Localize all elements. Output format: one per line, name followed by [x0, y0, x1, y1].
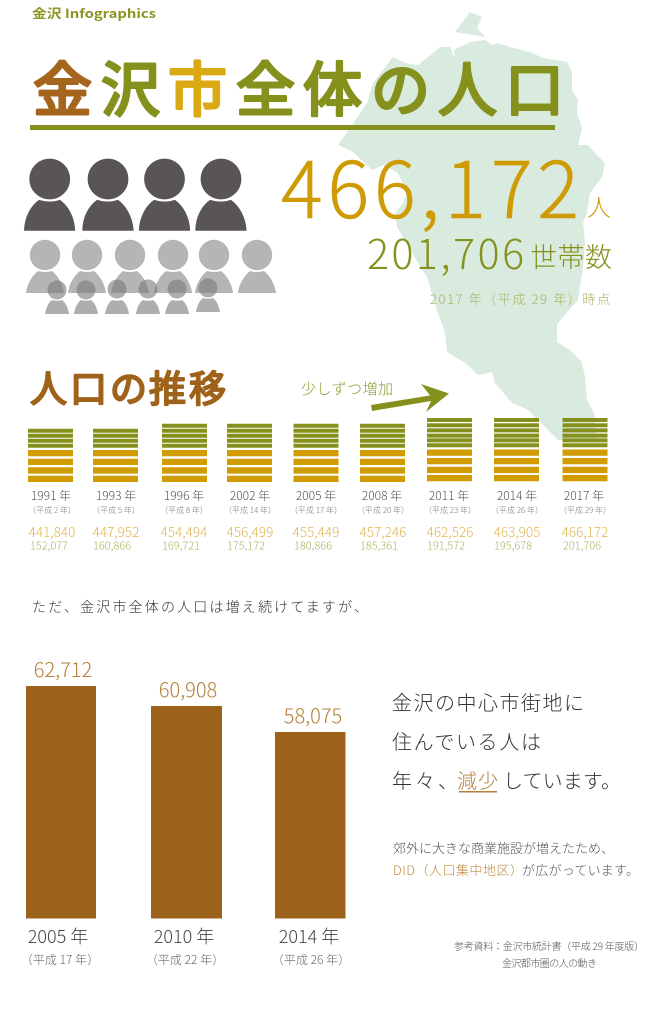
labels 2008: 457,246 [360, 521, 406, 541]
labels 1993: 1993 年 [96, 487, 136, 504]
labels 2005: （平成 17 年） [290, 505, 342, 516]
heading: population trend: の [110, 359, 147, 413]
labels 2005 [290, 487, 342, 554]
main message: 年々、 [392, 765, 458, 794]
title: 体 [303, 43, 362, 128]
labels 2014: 2014 年 [497, 487, 537, 504]
bar 1993 [93, 429, 138, 482]
title: 沢 [101, 43, 160, 128]
era label 2010: （平成 22 年） [146, 951, 224, 968]
labels 1991: 152,077 [30, 538, 68, 554]
labels 2011 [424, 487, 476, 554]
labels 1996: 169,721 [162, 538, 200, 554]
date note: 2017 年（平成 29 年）時点 [430, 289, 610, 308]
bar labels [28, 487, 611, 554]
labels 1991 [28, 487, 76, 554]
bar 2005 [26, 686, 96, 918]
title: 全 [236, 43, 295, 128]
labels 1991: 441,840 [29, 521, 75, 541]
bar 2011 [427, 418, 472, 481]
year label 2014: 2014 年 [279, 923, 339, 949]
annotation: gradually increasing: 少しずつ増加 [301, 378, 393, 399]
transition sentence: ただ、金沢市全体の人口は増え続けてますが、 [32, 597, 368, 617]
heading: population trend: 推 [149, 359, 186, 413]
labels 1996: 454,494 [161, 521, 207, 541]
title: 市 [168, 43, 227, 128]
labels 2014: （平成 26 年） [491, 505, 543, 516]
stacked bars 1991-2017 [28, 418, 608, 482]
main message: 金沢の中心市街地に [392, 687, 584, 716]
main message: 減少 [457, 765, 498, 794]
labels 1993 [92, 487, 140, 554]
value 2014: 58,075 [284, 700, 342, 729]
labels 2008: （平成 20 年） [357, 505, 409, 516]
labels 2014: 463,905 [494, 521, 540, 541]
bar 2014 [275, 732, 346, 918]
labels 2008 [357, 487, 409, 554]
bar 2014 [494, 418, 539, 481]
main message: 住んでいる人は [392, 726, 541, 755]
title [33, 43, 564, 128]
sources [454, 938, 644, 970]
labels 2017: 466,172 [562, 521, 608, 541]
bar 1996 [162, 424, 207, 482]
labels 2002: 175,172 [227, 538, 265, 554]
main message [392, 687, 621, 794]
underline: decrease [459, 791, 497, 792]
labels 2011: 462,526 [427, 521, 473, 541]
labels 2017: 201,706 [563, 538, 601, 554]
title: 口 [505, 43, 564, 128]
bar 2008 [360, 424, 405, 482]
labels 1993: （平成 5 年） [92, 505, 140, 516]
unit: households: 世帯数 [530, 236, 612, 275]
heading: population trend: 口 [70, 359, 107, 413]
map of Kanazawa city [338, 12, 605, 440]
bar 2017 [562, 418, 608, 481]
labels 2011: （平成 23 年） [424, 505, 476, 516]
title: 人 [438, 43, 497, 128]
icon: small people (children) [45, 278, 220, 314]
sources: 参考資料：金沢市統計書（平成 29 年度版） [454, 938, 644, 953]
labels 2014 [491, 487, 543, 554]
icon: medium people [26, 240, 276, 293]
labels 2017: 2017 年 [564, 487, 604, 504]
labels 2002: 2002 年 [230, 487, 270, 504]
labels 2005: 2005 年 [296, 487, 336, 504]
labels 2008: 185,361 [360, 538, 398, 554]
heading: population trend: 移 [189, 359, 226, 413]
main message: しています。 [503, 765, 621, 794]
explanation text [393, 838, 639, 879]
title underline [30, 125, 555, 130]
bar 2005 [294, 424, 338, 482]
labels 2005: 455,449 [293, 521, 339, 541]
labels 1996: 1996 年 [164, 487, 204, 504]
era label 2014: （平成 26 年） [272, 951, 350, 968]
labels 1993: 160,866 [93, 538, 131, 554]
arrow [371, 384, 449, 412]
year label 2005: 2005 年 [28, 923, 88, 949]
households: 201,706 [367, 221, 524, 281]
labels 2008: 2008 年 [362, 487, 402, 504]
year label 2010: 2010 年 [154, 923, 214, 949]
labels 2002: 456,499 [227, 521, 273, 541]
labels 2017 [559, 487, 611, 554]
labels 2002 [224, 487, 276, 554]
bar 2010 [151, 706, 222, 918]
heading: population trend [30, 359, 226, 413]
total population: 466,172 [281, 129, 579, 241]
labels 1993: 447,952 [93, 521, 139, 541]
labels 2011: 2011 年 [429, 487, 469, 504]
explanation text: DID（人口集中地区） [393, 860, 523, 879]
title: 金 [33, 43, 92, 128]
value 2005: 62,712 [34, 654, 92, 683]
title: の [371, 43, 430, 128]
labels 1996 [160, 487, 208, 554]
labels 2011: 191,572 [427, 538, 465, 554]
bar chart: central district population [21, 654, 350, 968]
labels 2017: （平成 29 年） [559, 505, 611, 516]
labels 1991: 1991 年 [31, 487, 71, 504]
sources: 金沢都市圏の人の動き [502, 955, 597, 970]
unit: people: 人 [587, 188, 611, 223]
explanation text: 郊外に大きな商業施設が増えたため、 [393, 838, 614, 857]
value 2010: 60,908 [159, 674, 217, 703]
bar 2002 [227, 424, 272, 482]
labels 2002: （平成 14 年） [224, 505, 276, 516]
labels 1991: （平成 2 年） [28, 505, 76, 516]
labels 2005: 180,866 [294, 538, 332, 554]
header label: 金沢 Infographics [32, 3, 156, 22]
heading: population trend: 人 [30, 359, 67, 413]
bar 1991 [28, 429, 73, 482]
icon: large people (adults) [24, 158, 247, 231]
labels 2014: 195,678 [494, 538, 532, 554]
labels 1996: （平成 8 年） [160, 505, 208, 516]
explanation text: が広がっています。 [522, 860, 639, 879]
era label 2005: （平成 17 年） [21, 951, 99, 968]
